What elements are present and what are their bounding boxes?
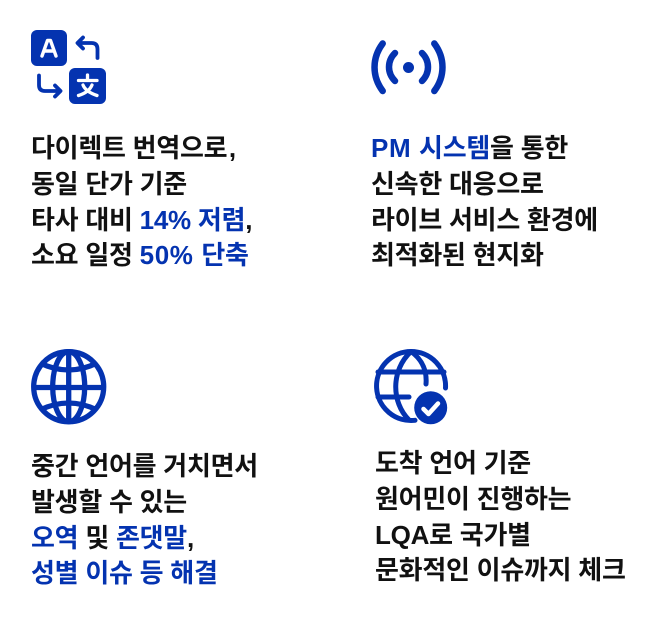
heading: direct translation: 타사 대비 14% 저렴, (31, 205, 252, 235)
heading: native LQA: 문화적인 이슈까지 체크 (375, 555, 626, 585)
heading: PM system: 최적화된 현지화 (371, 240, 544, 270)
heading: avoiding mistranslation: 중간 언어를 거치면서 (31, 451, 258, 481)
icon: globe (31, 349, 106, 424)
heading: PM system: 신속한 대응으로 (371, 169, 544, 199)
heading: native LQA: 도착 언어 기준 (375, 448, 531, 478)
icon: translation (31, 30, 106, 104)
icon: broadcast signal (371, 40, 446, 94)
heading: PM system: PM 시스템을 통한 (371, 133, 568, 163)
heading: native LQA (375, 448, 626, 585)
heading: avoiding mistranslation: 성별 이슈 등 해결 (31, 558, 218, 588)
heading: direct translation (31, 133, 252, 270)
heading: direct translation: 소요 일정 50% 단축 (31, 240, 249, 270)
heading: PM system (371, 133, 598, 270)
heading: native LQA: 원어민이 진행하는 (375, 484, 571, 514)
heading: avoiding mistranslation (31, 451, 258, 588)
icon: globe with check badge (374, 349, 448, 424)
heading: native LQA: LQA로 국가별 (375, 520, 531, 550)
heading: direct translation: 다이렉트 번역으로, (31, 133, 236, 163)
heading: PM system: 라이브 서비스 환경에 (371, 205, 598, 235)
heading: avoiding mistranslation: 오역 및 존댓말, (31, 523, 194, 553)
heading: avoiding mistranslation: 발생할 수 있는 (31, 487, 187, 517)
heading: direct translation: 동일 단가 기준 (31, 169, 187, 199)
